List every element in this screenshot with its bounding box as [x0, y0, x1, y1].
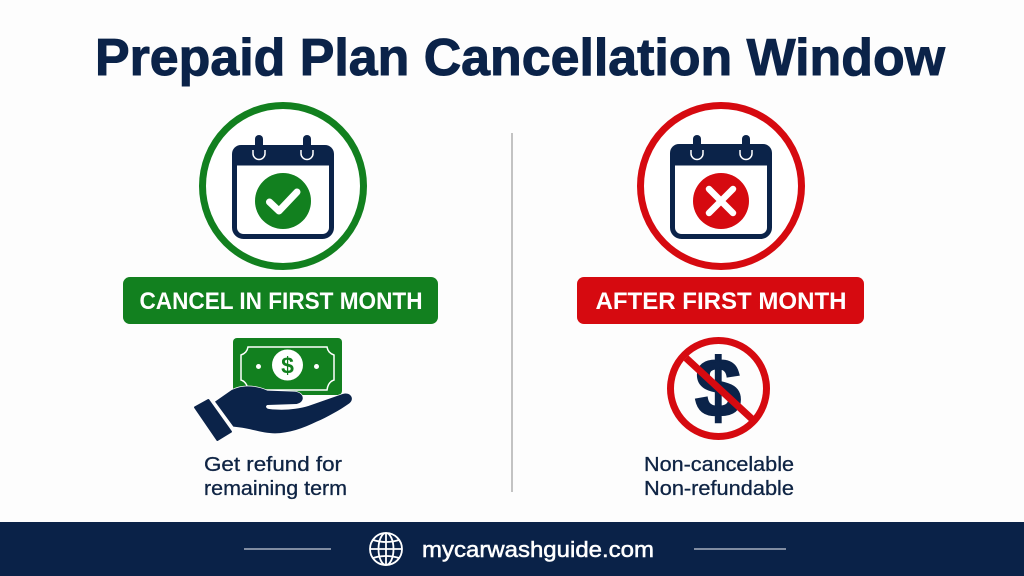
icon: calendar with x	[640, 106, 802, 266]
title: Prepaid Plan Cancellation Window	[95, 29, 946, 87]
text: refund: Get refund for	[204, 454, 342, 476]
badge: cancel in first month: CANCEL IN FIRST MONTH	[140, 288, 422, 315]
icon: hand holding money	[195, 338, 352, 440]
text: refund: remaining term	[204, 478, 347, 500]
badge: after first month	[577, 277, 864, 324]
icon: calendar with check	[202, 106, 364, 266]
footer url: mycarwashguide.com	[422, 537, 654, 562]
footer bar	[0, 522, 1024, 576]
badge: cancel in first month	[123, 277, 438, 324]
icon: no dollar: $	[695, 343, 741, 434]
icon: globe	[370, 533, 402, 565]
icon: hand holding money: $	[281, 352, 294, 378]
panel: after first month	[577, 106, 864, 500]
badge: after first month: AFTER FIRST MONTH	[596, 288, 846, 315]
text: non-refundable: Non-cancelable	[644, 454, 794, 476]
panel: cancel in first month	[123, 106, 438, 500]
text: non-refundable: Non-refundable	[644, 478, 794, 500]
icon: no dollar	[670, 340, 766, 436]
